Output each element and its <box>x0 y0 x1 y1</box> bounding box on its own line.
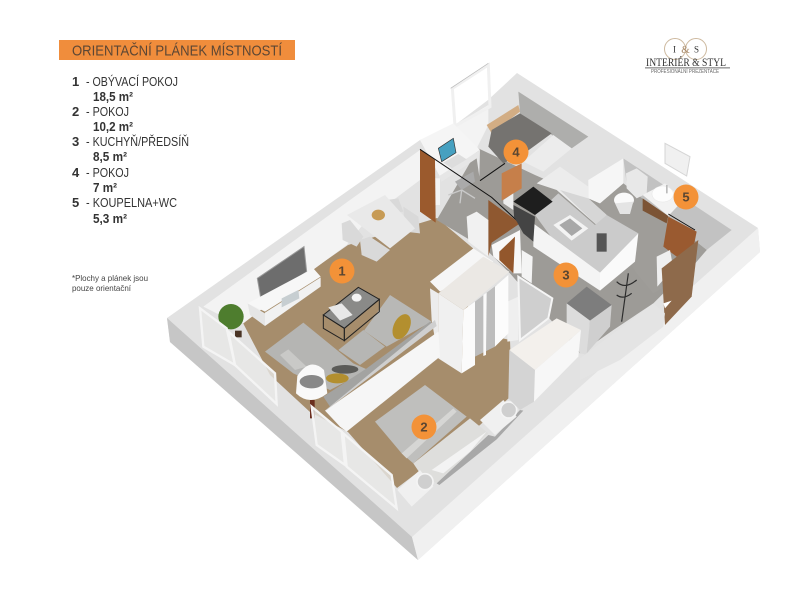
title banner: ORIENTAČNÍ PLÁNEK MÍSTNOSTÍ <box>72 42 283 60</box>
logo: INTERIÉR & STYL <box>646 55 726 69</box>
central wardrobe <box>430 248 509 373</box>
nightstand right <box>480 400 517 435</box>
room legend: 5 <box>72 195 79 210</box>
bathroom door <box>663 217 697 257</box>
room legend: 8,5 m² <box>93 149 128 164</box>
logo <box>645 38 730 75</box>
footnote <box>72 273 148 293</box>
room legend: 5,3 m² <box>93 211 128 226</box>
door rails <box>420 149 520 223</box>
media unit <box>248 268 321 326</box>
barn door centre <box>488 200 520 257</box>
badge 1: 1 <box>338 264 346 278</box>
barn door room 4 <box>502 163 522 201</box>
concrete floors <box>437 148 707 353</box>
living room wall <box>203 150 420 323</box>
vanity <box>643 183 683 223</box>
badge 4 <box>504 140 528 164</box>
footnote: *Plochy a plánek jsou <box>72 273 148 283</box>
footnote: pouze orientační <box>72 283 132 293</box>
coat rack <box>617 273 637 322</box>
entrance door <box>662 240 698 325</box>
logo: & <box>681 44 690 56</box>
room legend: - POKOJ <box>86 165 129 180</box>
bathroom walls <box>623 158 732 250</box>
mirror <box>665 143 690 176</box>
badge 5: 5 <box>682 190 690 204</box>
badge 3: 3 <box>562 268 570 282</box>
room legend: 18,5 m² <box>93 89 134 104</box>
logo: PROFESIONÁLNÍ PREZENTACE <box>651 68 719 75</box>
room legend: 4 <box>72 165 80 180</box>
room legend: - OBÝVACÍ POKOJ <box>86 74 178 89</box>
fridge <box>567 287 612 355</box>
entrance wall top <box>580 303 665 380</box>
room legend: - KUCHYŇ/PŘEDSÍŇ <box>86 134 189 149</box>
desk with laptop <box>420 123 480 205</box>
closet behind wardrobe <box>507 297 518 342</box>
room legend: - POKOJ <box>86 104 129 119</box>
room legend: 1 <box>72 74 79 89</box>
window living <box>200 308 277 404</box>
plant <box>218 304 244 337</box>
sofa <box>265 295 435 407</box>
badge 3 <box>554 262 578 288</box>
coffee table <box>323 287 379 341</box>
dining table <box>347 195 415 248</box>
room legend: 3 <box>72 134 79 149</box>
bed room 4 <box>487 105 572 172</box>
room legend: 7 m² <box>93 180 118 195</box>
badge 1 <box>330 258 354 284</box>
room 4 walls <box>518 92 588 148</box>
room legend: 2 <box>72 104 79 119</box>
building shell <box>167 73 760 560</box>
floor lamp <box>296 365 327 418</box>
cooktop and oven <box>503 187 553 242</box>
window <box>452 65 490 126</box>
badge 2 <box>412 414 436 440</box>
room legend: 10,2 m² <box>93 119 134 134</box>
TV <box>257 247 307 303</box>
kitchen island <box>533 167 638 291</box>
wardrobe right <box>508 318 581 410</box>
toilet <box>614 168 648 214</box>
low white cabinet <box>467 212 488 257</box>
floor plan <box>167 63 760 560</box>
badge 4: 4 <box>512 144 520 160</box>
bedroom furniture <box>375 318 581 507</box>
office chair <box>448 172 475 203</box>
badge 5 <box>674 184 698 210</box>
wall between rooms <box>325 332 440 432</box>
logo: I <box>673 44 676 54</box>
glass partition <box>518 277 552 340</box>
wall shadow behind bed <box>437 410 523 485</box>
living and bedroom <box>200 195 440 508</box>
cabinet by entrance <box>657 250 673 287</box>
badge 2: 2 <box>420 420 428 434</box>
barn door left <box>420 149 436 223</box>
room 4 upper <box>420 63 732 380</box>
white door frame <box>492 230 522 273</box>
logo: S <box>694 44 699 54</box>
nightstand left <box>397 470 433 507</box>
window bedroom <box>312 407 397 508</box>
wood floors <box>243 218 512 488</box>
room legend: - KOUPELNA+WC <box>86 195 177 210</box>
bed room 2 <box>375 385 488 483</box>
dining chairs <box>342 198 420 262</box>
room legend <box>72 74 189 226</box>
